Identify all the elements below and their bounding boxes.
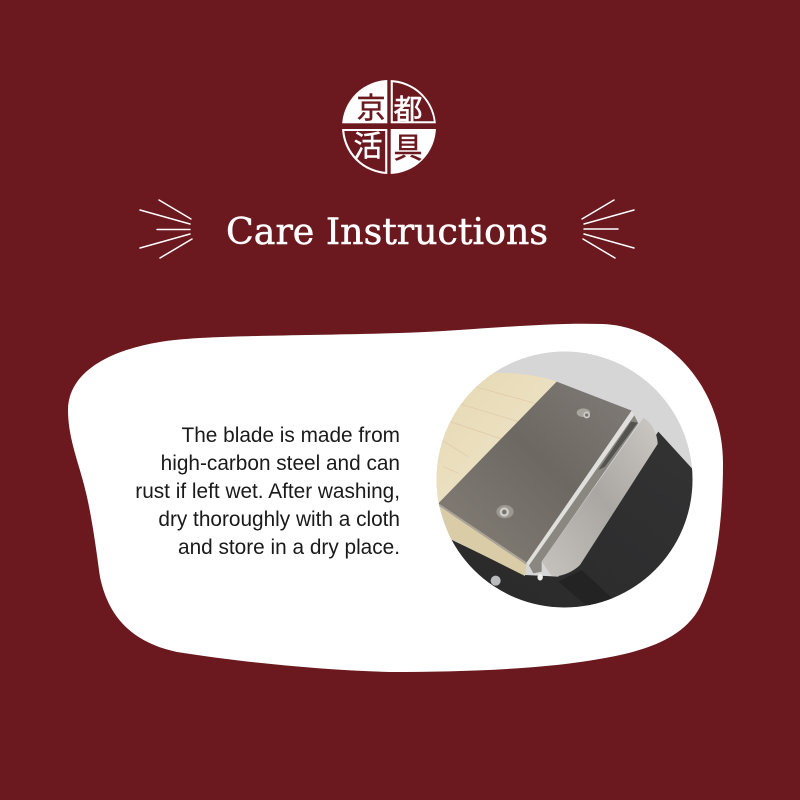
plate edge highlight — [527, 411, 634, 565]
right sunburst icon — [582, 200, 634, 258]
blade — [542, 418, 658, 576]
body text — [135, 424, 400, 559]
body text: high-carbon steel and can — [161, 452, 400, 475]
photo: scraper blade — [436, 352, 692, 608]
logo — [342, 80, 437, 175]
title: Care Instructions — [226, 212, 548, 253]
metal plate — [438, 382, 632, 563]
black base — [445, 432, 695, 613]
screws — [577, 408, 590, 417]
body text: and store in a dry place. — [178, 536, 400, 559]
body text: rust if left wet. After washing, — [135, 480, 400, 503]
body text: dry thoroughly with a cloth — [158, 508, 400, 531]
curl — [537, 574, 543, 580]
wood strip under plate — [438, 503, 527, 576]
logo: 都 — [393, 87, 423, 129]
logo: 京 — [356, 85, 386, 127]
white blob panel — [68, 324, 723, 672]
logo: 活 — [353, 123, 383, 165]
left sunburst icon — [140, 200, 192, 258]
wood handle — [432, 373, 557, 503]
logo: 具 — [393, 125, 423, 167]
body text: The blade is made from — [182, 424, 400, 447]
gap under plate — [529, 415, 638, 573]
